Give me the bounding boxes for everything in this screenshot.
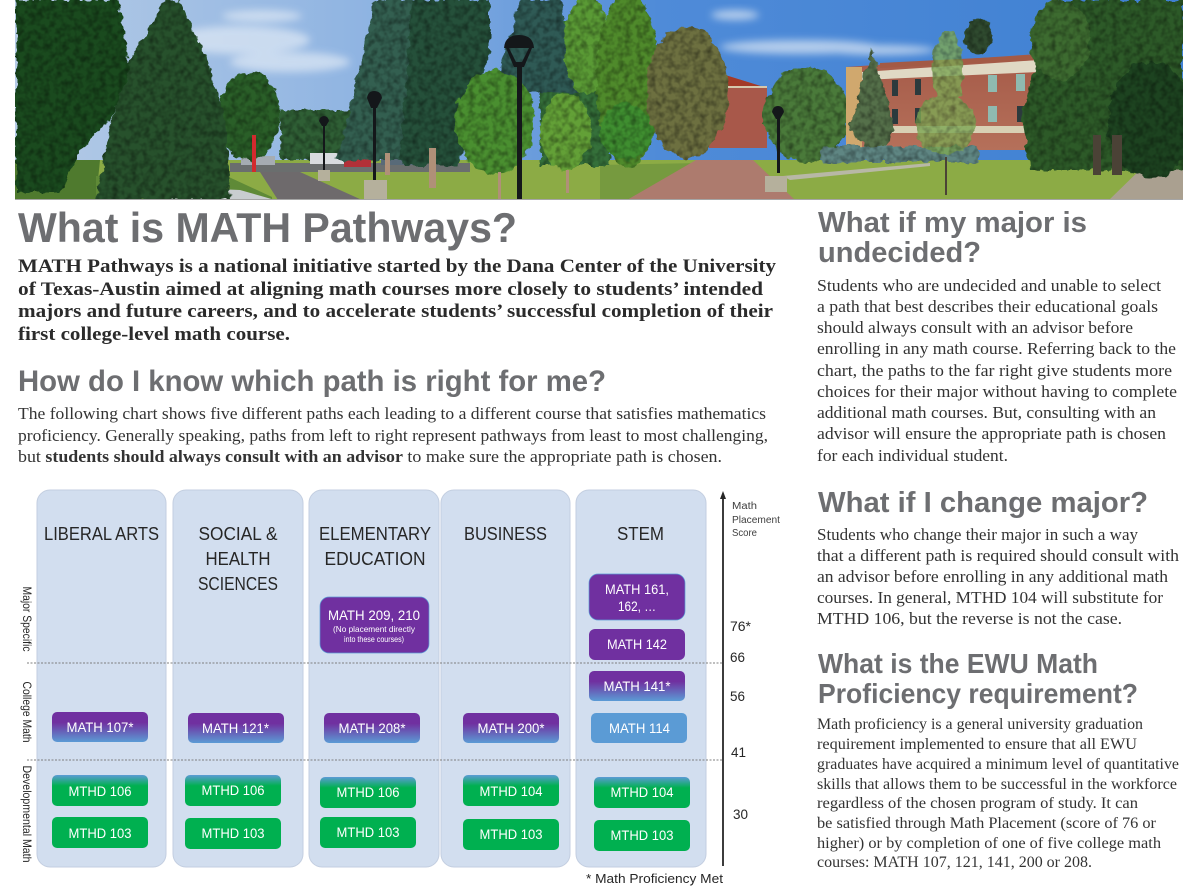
- score labels: 30: [733, 806, 748, 822]
- axis labels: course levels: College Math: [20, 681, 34, 743]
- text: major undecided: Students who are undecided and unable to select: [817, 276, 1161, 295]
- heading: change major: What if I change major?: [818, 487, 1148, 519]
- course boxes: developmental math: MTHD 103: [202, 826, 264, 841]
- score labels: 76*: [730, 618, 752, 634]
- young sapling: [915, 32, 975, 155]
- score labels: 66: [730, 649, 745, 665]
- intro text block: MATH Pathways is a national initiative started by the Dana Center of the University: [18, 256, 777, 277]
- column: elementary education: ELEMENTARY: [319, 524, 431, 544]
- red building: [709, 70, 767, 148]
- text: major undecided: additional math courses. But, consulting with an: [817, 403, 1156, 422]
- axis title: math placement score: [732, 501, 780, 539]
- course boxes: college math: MATH 121*: [202, 721, 270, 736]
- course boxes: college math: [52, 671, 687, 743]
- text: EWU math proficiency: higher) or by completion of one of five college math: [817, 835, 1161, 852]
- heading: EWU math proficiency: What is the EWU Math: [818, 648, 1098, 679]
- course boxes: developmental math: MTHD 103: [610, 828, 674, 843]
- text: EWU math proficiency: be satisfied through Math Placement (score of 76 or: [817, 815, 1157, 832]
- column: elementary education: [309, 490, 439, 867]
- course boxes: developmental math: MTHD 106: [202, 783, 264, 798]
- column: social and health sciences: HEALTH: [206, 549, 270, 569]
- column: business: [441, 490, 570, 867]
- text: EWU math proficiency: skills that allows them to be successful in the workforce: [817, 776, 1177, 793]
- axis labels: course levels: Major Specific: [20, 586, 34, 652]
- course boxes: major specific: 162, …: [618, 599, 656, 614]
- lawns and paths: [98, 160, 1136, 199]
- heading: EWU math proficiency: [818, 648, 1138, 709]
- course boxes: developmental math: MTHD 106: [68, 784, 132, 799]
- heading: major undecided: What if my major is: [818, 207, 1087, 239]
- chart explanation text: but students should always consult with an advisor to make sure the appropriate path is chosen.: [18, 447, 722, 466]
- course boxes: college math: MATH 114: [609, 721, 670, 736]
- course boxes: major specific: into these courses): [344, 634, 404, 644]
- score labels: [730, 618, 752, 822]
- course boxes: developmental math: MTHD 103: [336, 825, 400, 840]
- column: liberal arts: [37, 490, 166, 867]
- course boxes: college math: MATH 208*: [338, 721, 406, 736]
- course boxes: developmental math: [52, 775, 690, 851]
- column: social and health sciences: [173, 490, 303, 867]
- course boxes: major specific: MATH 142: [607, 637, 667, 652]
- heading: major undecided: [818, 207, 1087, 269]
- text: change major: MTHD 106, but the reverse is not the case.: [817, 609, 1122, 628]
- trunks and lamps: [385, 148, 569, 200]
- course boxes: developmental math: MTHD 104: [610, 785, 674, 800]
- pathways chart: [20, 490, 780, 886]
- text: major undecided: for each individual student.: [817, 446, 1008, 465]
- text: change major: that a different path is required should consult with: [817, 546, 1180, 565]
- text: EWU math proficiency: requirement implemented to ensure that all EWU: [817, 736, 1137, 753]
- course boxes: developmental math: MTHD 103: [68, 826, 132, 841]
- column: STEM: STEM: [617, 524, 664, 544]
- course boxes: developmental math: MTHD 104: [480, 784, 543, 799]
- column: STEM: [576, 490, 706, 867]
- text: major undecided: a path that best describes their educational goals: [817, 297, 1158, 316]
- text: EWU math proficiency: Math proficiency is a general university graduation: [817, 716, 1143, 733]
- text: major undecided: [817, 276, 1177, 465]
- course boxes: college math: MATH 107*: [66, 720, 134, 735]
- chart explanation text: proficiency. Generally speaking, paths from left to right represent pathways from least to most challenging,: [18, 426, 768, 445]
- text: EWU math proficiency: graduates have acquired a minimum level of quantitative: [817, 756, 1179, 773]
- axis labels: course levels: [20, 586, 34, 862]
- heading: EWU math proficiency: Proficiency requirement?: [818, 678, 1138, 709]
- trees: [16, 0, 1192, 200]
- score labels: 56: [730, 688, 745, 704]
- intro text block: [18, 256, 777, 345]
- cars and sculpture: [241, 156, 275, 165]
- intro text block: first college-level math course.: [18, 324, 290, 345]
- footnote: proficiency met: * Math Proficiency Met: [586, 871, 723, 886]
- intro text block: of Texas-Austin aimed at aligning math courses more closely to students’ intended: [18, 279, 763, 300]
- text: change major: [817, 525, 1180, 628]
- photo: campus panorama banner: [15, 0, 1192, 200]
- axis title: math placement score: Math: [732, 501, 757, 512]
- course boxes: major specific: MATH 209, 210: [328, 608, 420, 623]
- course boxes: college math: MATH 200*: [478, 721, 545, 736]
- chart explanation text: [18, 404, 768, 466]
- text: major undecided: chart, the paths to the far right give students more: [817, 361, 1172, 380]
- column: social and health sciences: SOCIAL &: [198, 524, 278, 544]
- arrow: math placement score axis: [720, 491, 726, 866]
- heading: major undecided: undecided?: [818, 237, 981, 269]
- heading: how do I know which path: How do I know which path is right for me?: [18, 365, 606, 398]
- background tree line: [280, 20, 610, 165]
- column: social and health sciences: SCIENCES: [198, 574, 278, 594]
- intro text block: majors and future careers, and to accelerate students’ successful completion of their: [18, 301, 774, 322]
- text: change major: Students who change their major in such a way: [817, 525, 1139, 544]
- title: What is MATH Pathways?: [18, 204, 517, 251]
- text: EWU math proficiency: [817, 716, 1179, 871]
- chart explanation text: The following chart shows five different paths each leading to a different course that satisfies mathematics: [18, 404, 766, 423]
- text: major undecided: enrolling in any math course. Referring back to the: [817, 339, 1176, 358]
- axis title: math placement score: Placement: [732, 515, 780, 526]
- text: EWU math proficiency: courses: MATH 107, 121, 141, 200 or 208.: [817, 854, 1092, 871]
- course boxes: developmental math: MTHD 103: [480, 827, 542, 842]
- axis title: math placement score: Score: [732, 528, 757, 539]
- course boxes: major specific: [320, 574, 685, 660]
- column: liberal arts: LIBERAL ARTS: [44, 524, 159, 544]
- column: elementary education: EDUCATION: [324, 549, 426, 569]
- column: business: BUSINESS: [464, 524, 547, 544]
- text: major undecided: choices for their major without having to complete: [817, 382, 1177, 401]
- course boxes: developmental math: MTHD 106: [336, 785, 400, 800]
- score labels: 41: [731, 744, 746, 760]
- text: change major: courses. In general, MTHD 104 will substitute for: [817, 588, 1164, 607]
- text: EWU math proficiency: regardless of the chosen program of study. It can: [817, 795, 1138, 812]
- text: major undecided: advisor will ensure the appropriate path is chosen: [817, 424, 1166, 443]
- axis labels: course levels: Developmental Math: [20, 766, 34, 862]
- text: major undecided: should always consult with an advisor before: [817, 318, 1133, 337]
- text: change major: an advisor before enrolling in any additional math: [817, 567, 1169, 586]
- brick building: [764, 67, 848, 163]
- course boxes: major specific: MATH 161,: [605, 582, 669, 597]
- course boxes: major specific: (No placement directly: [333, 624, 416, 634]
- course boxes: college math: MATH 141*: [604, 679, 671, 694]
